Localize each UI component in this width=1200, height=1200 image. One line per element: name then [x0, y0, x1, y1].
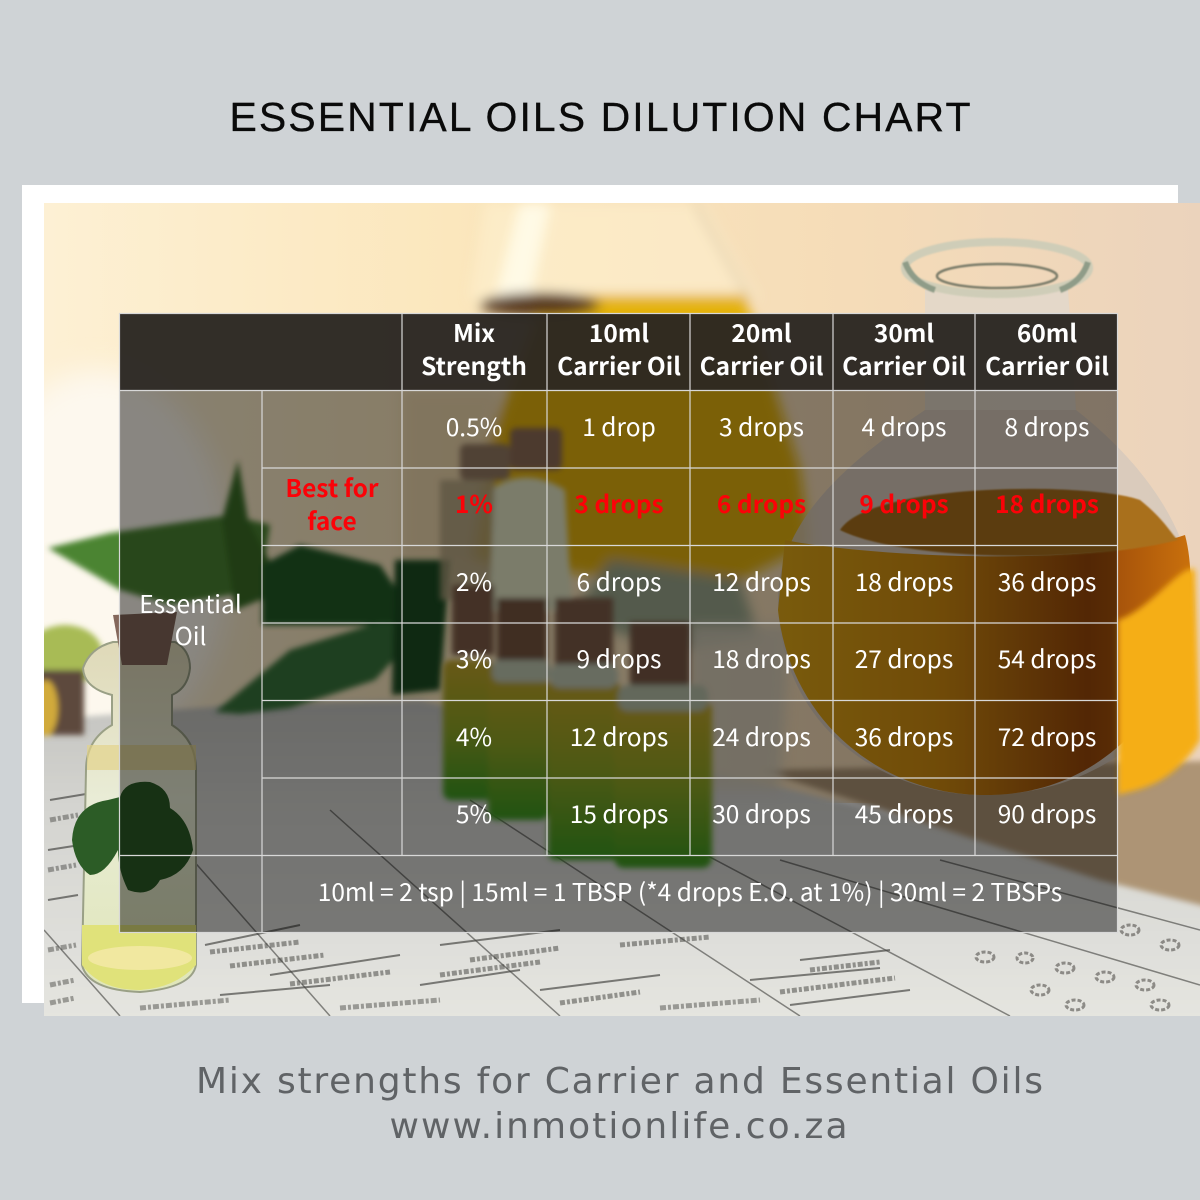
row 4% [456, 719, 1096, 754]
row 0.5%: 4 drops [861, 409, 947, 444]
row 0.5%: 8 drops [1004, 409, 1090, 444]
row 5%: 45 drops [855, 796, 953, 831]
clear vial with leaf in foreground [72, 612, 196, 992]
wall background [44, 203, 1200, 803]
header row text: Mix [453, 315, 495, 350]
header row text [421, 315, 1109, 383]
row 3%: 18 drops [712, 641, 811, 676]
photo: essential oil bottles on paper [0, 203, 1200, 1060]
row 0.5% [446, 409, 1090, 444]
row label: best for face: face [307, 503, 357, 538]
footer website: www.inmotionlife.co.za [390, 1106, 848, 1147]
title: ESSENTIAL OILS DILUTION CHART [230, 94, 970, 140]
row 5%: 15 drops [570, 796, 668, 831]
paper sheet [44, 698, 1200, 1016]
row 5%: 30 drops [712, 796, 811, 831]
row 5%: 90 drops [998, 796, 1096, 831]
header row text: 60ml [1017, 315, 1077, 350]
header row text: Carrier Oil [700, 348, 824, 383]
row 2%: 12 drops [712, 564, 811, 599]
row 2%: 2% [456, 564, 492, 599]
row 2%: 18 drops [855, 564, 953, 599]
table header background [119, 313, 1118, 390]
row label: essential oil: Essential [139, 586, 242, 621]
row 4%: 12 drops [570, 719, 668, 754]
row label: essential oil [139, 586, 242, 653]
row 1% highlighted: 18 drops [995, 486, 1099, 521]
row 1% highlighted: 9 drops [859, 486, 949, 521]
blurred green leaves [27, 460, 450, 736]
soft light on left wall [44, 363, 230, 718]
row 3%: 54 drops [998, 641, 1096, 676]
row 1% highlighted: 6 drops [717, 486, 806, 521]
blurred flask with yellow oil [402, 203, 810, 790]
row 2%: 36 drops [998, 564, 1096, 599]
white backing frame [22, 185, 1178, 1003]
row 5% [456, 796, 1096, 831]
row label: best for face: Best for [285, 470, 379, 505]
row 3%: 3% [456, 641, 492, 676]
paper form markings [44, 790, 1200, 1016]
row 4%: 24 drops [712, 719, 811, 754]
row 0.5%: 3 drops [719, 409, 804, 444]
row label: best for face [285, 470, 379, 538]
row 5%: 5% [456, 796, 492, 831]
row 0.5%: 0.5% [446, 409, 502, 444]
round bottle with amber oil [778, 242, 1200, 795]
header row text: 20ml [731, 315, 792, 350]
row 2% [456, 564, 1096, 599]
row 2%: 6 drops [576, 564, 662, 599]
row 3% [456, 641, 1096, 676]
row 0.5%: 1 drop [582, 409, 656, 444]
wooden table corner [760, 760, 1200, 920]
conversion note row: 10ml = 2 tsp | 15ml = 1 TBSP (*4 drops E.O. at 1%) | 30ml = 2 TBSPs [318, 874, 1062, 909]
header row text: Carrier Oil [842, 348, 966, 383]
header row text: Strength [421, 348, 527, 383]
row 1% highlighted: 1% [455, 486, 493, 521]
header row text: 30ml [874, 315, 934, 350]
table [119, 313, 1118, 933]
table grid lines [119, 313, 1118, 933]
blurred small bottles [440, 428, 712, 868]
table body tint [119, 390, 1118, 933]
row label: essential oil: Oil [175, 618, 206, 653]
row 3%: 9 drops [576, 641, 662, 676]
vial leaf [72, 782, 193, 892]
footer subtitle: Mix strengths for Carrier and Essential Oils [196, 1061, 1043, 1102]
row 4%: 72 drops [998, 719, 1096, 754]
header row text: 10ml [589, 315, 649, 350]
row 3%: 27 drops [855, 641, 953, 676]
bottle lip [905, 242, 1089, 294]
paper dotted symbols at right [976, 925, 1179, 1010]
row 4%: 36 drops [855, 719, 953, 754]
header row text: Carrier Oil [557, 348, 681, 383]
row 1% highlighted [455, 486, 1099, 521]
row 1% highlighted: 3 drops [574, 486, 664, 521]
header row text: Carrier Oil [985, 348, 1109, 383]
row 4%: 4% [456, 719, 492, 754]
